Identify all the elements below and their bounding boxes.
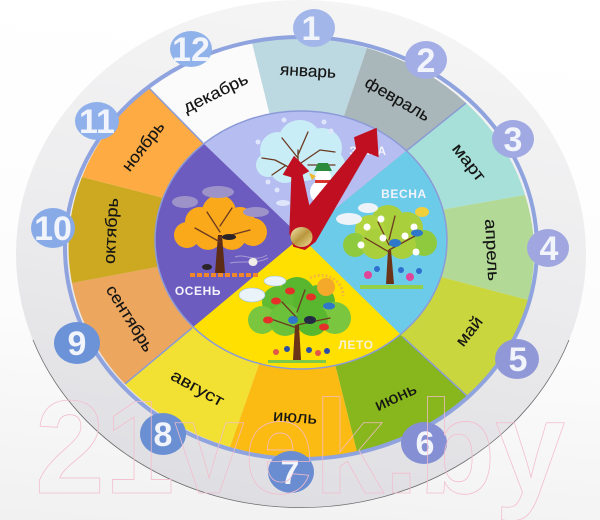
autumn sector <box>156 144 292 326</box>
month names <box>101 61 502 428</box>
март: март <box>448 140 489 185</box>
badge 4 <box>527 229 569 268</box>
лето label: ЛЕТО <box>338 338 374 352</box>
month ring <box>69 39 534 457</box>
апрель sector <box>301 195 534 300</box>
февраль sector <box>301 48 466 240</box>
summer sector <box>194 244 400 368</box>
badge 1 <box>293 9 335 48</box>
badge 11: 11 <box>79 103 115 141</box>
seasons outline <box>155 111 447 369</box>
winter tree <box>256 118 345 206</box>
spring tree <box>336 203 437 289</box>
май: май <box>452 313 487 350</box>
ноябрь sector <box>82 88 301 240</box>
badge 6: 6 <box>416 425 434 463</box>
season labels <box>175 144 427 352</box>
январь sector <box>252 39 367 240</box>
sun <box>310 275 343 296</box>
season sectors <box>156 112 446 368</box>
badge 10: 10 <box>34 210 72 248</box>
июль sector <box>230 240 357 457</box>
badge 8: 8 <box>154 416 172 454</box>
badge 5 <box>495 339 539 379</box>
winter sector <box>204 112 406 226</box>
snowman <box>309 163 332 203</box>
disc lower edge <box>33 340 569 508</box>
ноябрь: ноябрь <box>119 118 168 175</box>
декабрь sector <box>149 43 301 240</box>
badge 5: 5 <box>509 341 527 379</box>
июнь: июнь <box>372 380 419 415</box>
autumn tree <box>172 186 269 275</box>
июнь sector <box>301 240 467 452</box>
seasons circle <box>154 110 448 370</box>
декабрь: декабрь <box>180 70 251 117</box>
badge 2: 2 <box>417 42 435 80</box>
сентябрь sector <box>72 240 301 384</box>
badge 8 <box>140 413 186 455</box>
badge 4: 4 <box>540 230 559 268</box>
август: август <box>168 367 227 411</box>
badge 3: 3 <box>504 121 522 159</box>
badge 6 <box>401 422 447 464</box>
весна label: ВЕСНА <box>381 187 427 201</box>
февраль: февраль <box>362 74 433 125</box>
октябрь sector <box>69 177 301 283</box>
spokes <box>125 88 467 396</box>
spring sector <box>310 151 446 334</box>
осень label: ОСЕНЬ <box>175 284 221 298</box>
snowflakes <box>256 118 334 206</box>
badge 1: 1 <box>302 10 320 48</box>
сентябрь: сентябрь <box>102 282 157 355</box>
апрель: апрель <box>481 219 502 281</box>
badge 7: 7 <box>281 454 299 492</box>
май sector <box>301 240 528 396</box>
январь: январь <box>280 61 336 82</box>
август sector <box>125 240 301 447</box>
badge 2 <box>405 41 447 80</box>
октябрь: октябрь <box>101 198 122 264</box>
clock hands <box>283 128 379 250</box>
watermark: 21vek.by <box>35 374 565 520</box>
brass pin <box>290 227 312 247</box>
badge 9 <box>54 322 100 364</box>
summer tree <box>239 275 351 363</box>
badge 9: 9 <box>68 325 86 363</box>
badge 3 <box>492 120 534 159</box>
ring outline <box>65 37 537 459</box>
badge 7 <box>268 451 314 493</box>
март sector <box>301 103 525 240</box>
зима label: ЗИМА <box>349 144 387 158</box>
июль: июль <box>272 407 318 428</box>
badge 12: 12 <box>172 31 210 69</box>
